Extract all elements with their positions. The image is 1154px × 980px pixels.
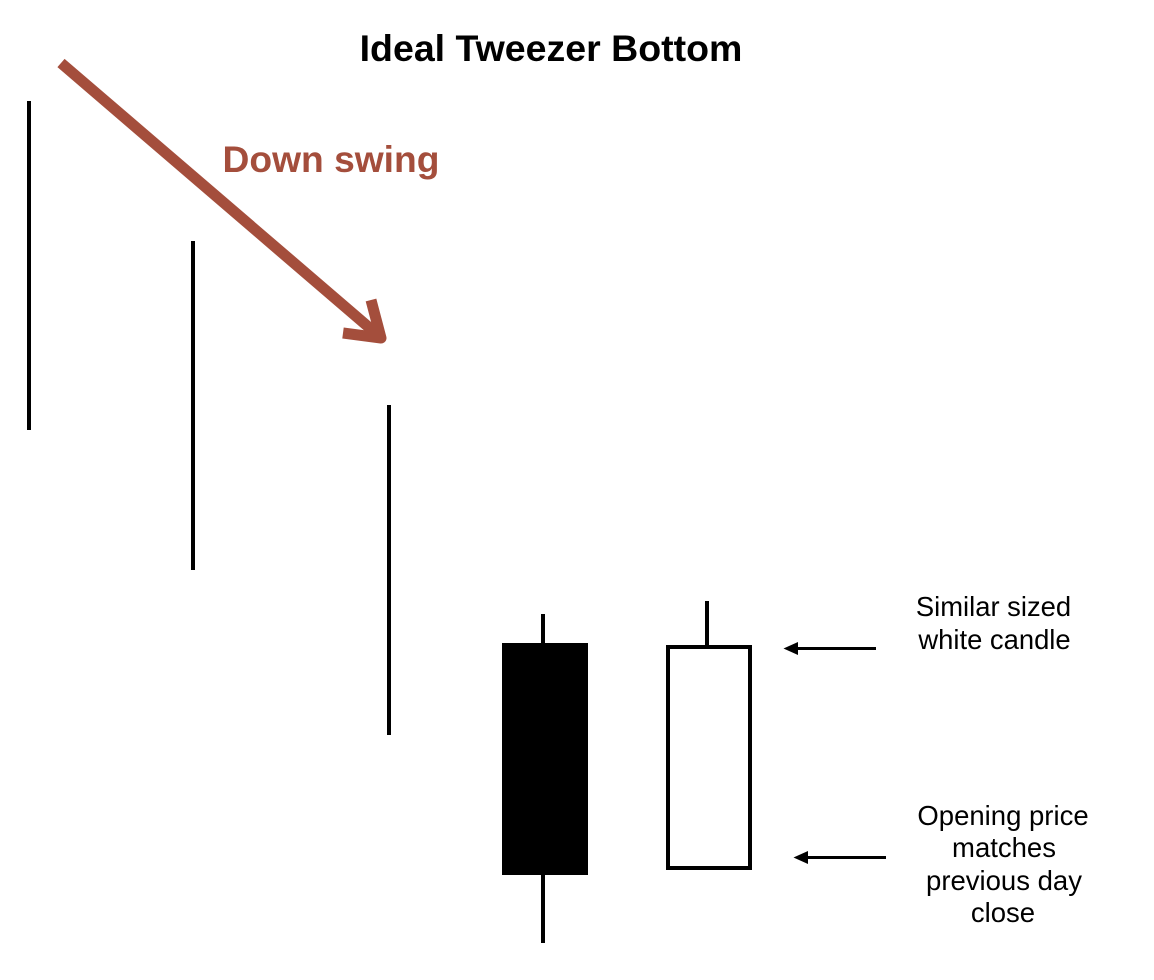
label: opening price matches previous day close: close [971, 897, 1035, 928]
label: similar sized white candle: white candle [917, 624, 1071, 655]
label: opening price matches previous day close [917, 800, 1089, 928]
candle line 1 [27, 101, 31, 430]
label: opening price matches previous day close: matches [952, 832, 1056, 863]
black candle [502, 614, 588, 943]
arrow: down swing [61, 63, 381, 338]
title: Ideal Tweezer Bottom [360, 27, 742, 69]
white candle [668, 601, 750, 868]
arrow: to white candle top [784, 642, 876, 655]
arrow: to white candle bottom [794, 851, 886, 864]
candle line 2 [191, 241, 195, 570]
label: opening price matches previous day close: Opening price [917, 800, 1089, 831]
label: similar sized white candle [916, 591, 1071, 655]
label: opening price matches previous day close: previous day [926, 865, 1082, 896]
label: down swing: Down swing [223, 138, 439, 180]
label: similar sized white candle: Similar sized [916, 591, 1071, 622]
candle line 3 [387, 405, 391, 735]
